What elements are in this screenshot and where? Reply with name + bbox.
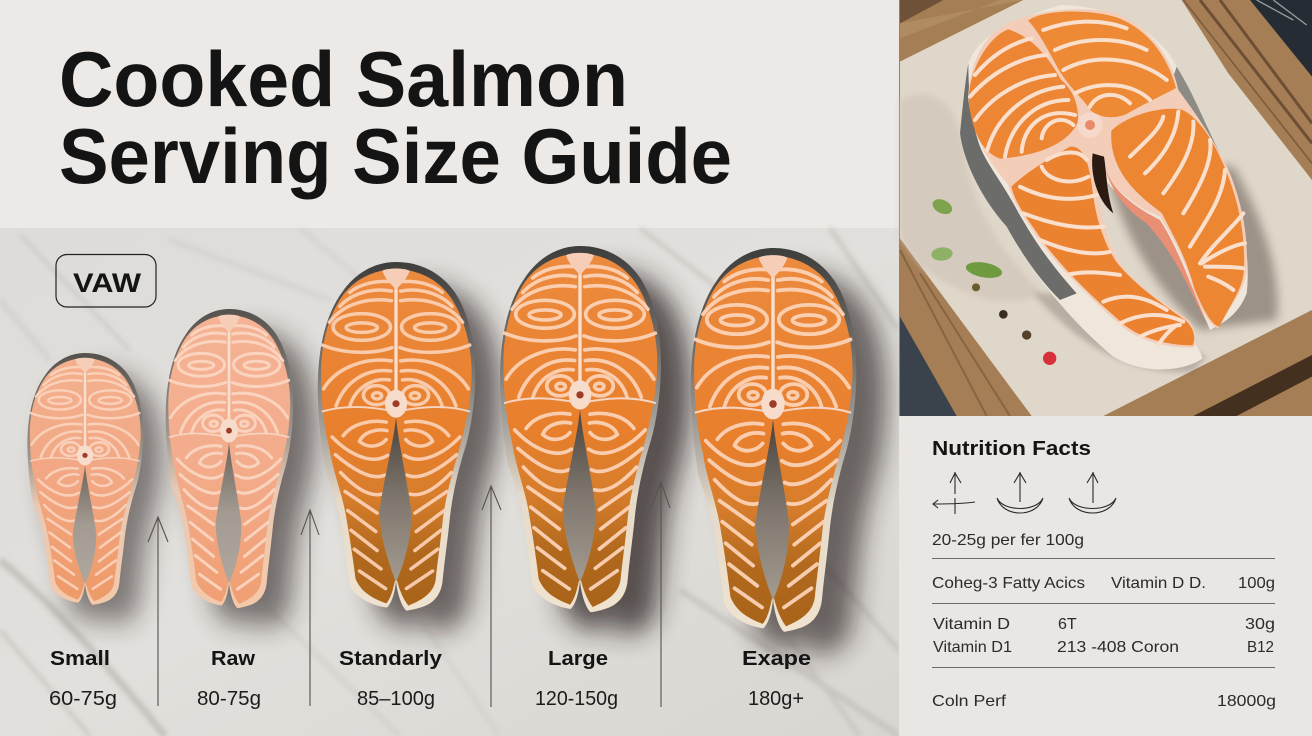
steak: extra large bbox=[691, 248, 886, 656]
label: standard: Standarly bbox=[339, 647, 443, 670]
row: omega: 100g bbox=[1238, 575, 1275, 592]
label: small: Small bbox=[50, 647, 110, 670]
row: total bbox=[932, 693, 1276, 710]
row: vitamin D: 6T bbox=[1058, 616, 1077, 633]
row: vitamin D: 30g bbox=[1245, 616, 1275, 633]
label: extra: 180g+ bbox=[748, 688, 804, 710]
label: raw: 80-75g bbox=[197, 688, 261, 710]
label: standard bbox=[339, 647, 443, 710]
panel: photo of salmon steak on board bbox=[899, 0, 1312, 416]
protein line: 20-25g per fer 100g bbox=[932, 532, 1084, 549]
steak: raw bbox=[166, 309, 316, 629]
row: vitamin D1: Vitamin D1 bbox=[933, 639, 1012, 656]
arrow 4 bbox=[651, 482, 670, 707]
title bbox=[59, 35, 732, 200]
steak: standard bbox=[318, 262, 501, 633]
row: omega: Coheg-3 Fatty Acics bbox=[932, 575, 1085, 592]
steak: small bbox=[27, 353, 162, 625]
row: vitamin D: Vitamin D bbox=[933, 616, 1010, 633]
label: extra: Exape bbox=[742, 647, 811, 670]
label: large bbox=[535, 647, 618, 710]
arrow 2 bbox=[301, 510, 319, 706]
label: raw bbox=[197, 647, 261, 710]
row: vitamin D1: B12 bbox=[1247, 639, 1274, 656]
panel: marble serving sizes bbox=[0, 228, 899, 736]
icon: bowl arrow 1 bbox=[997, 472, 1043, 513]
label: raw: Raw bbox=[211, 647, 255, 670]
title: Serving Size Guide bbox=[59, 112, 732, 200]
row: vitamin D bbox=[933, 616, 1275, 633]
header background bbox=[0, 0, 899, 228]
row: total: Coln Perf bbox=[932, 693, 1007, 710]
salmon steak bbox=[960, 5, 1248, 369]
label: large: 120-150g bbox=[535, 688, 618, 710]
size tag bbox=[56, 254, 156, 307]
arrow 3 bbox=[482, 486, 501, 707]
label: standard: 85–100g bbox=[357, 688, 435, 710]
row: omega: Vitamin D D. bbox=[1111, 575, 1206, 592]
panel: nutrition facts bbox=[899, 416, 1312, 736]
steak: large bbox=[500, 246, 691, 636]
arrow 1 bbox=[148, 517, 168, 706]
icon: cross arrow bbox=[933, 472, 975, 514]
row: omega bbox=[932, 575, 1275, 592]
title: Cooked Salmon bbox=[59, 35, 628, 123]
row: total: 18000g bbox=[1217, 693, 1276, 710]
size tag: VAW bbox=[73, 268, 142, 298]
nutrition heading: Nutrition Facts bbox=[932, 437, 1091, 460]
label: extra bbox=[742, 647, 811, 710]
row: vitamin D1: 213 -408 Coron bbox=[1057, 639, 1179, 656]
label: small bbox=[49, 647, 117, 710]
row: vitamin D1 bbox=[933, 639, 1274, 656]
herbs and peppercorns bbox=[930, 196, 1056, 365]
label: small: 60-75g bbox=[49, 688, 117, 710]
icon: bowl arrow 2 bbox=[1069, 472, 1116, 513]
label: large: Large bbox=[548, 647, 608, 670]
